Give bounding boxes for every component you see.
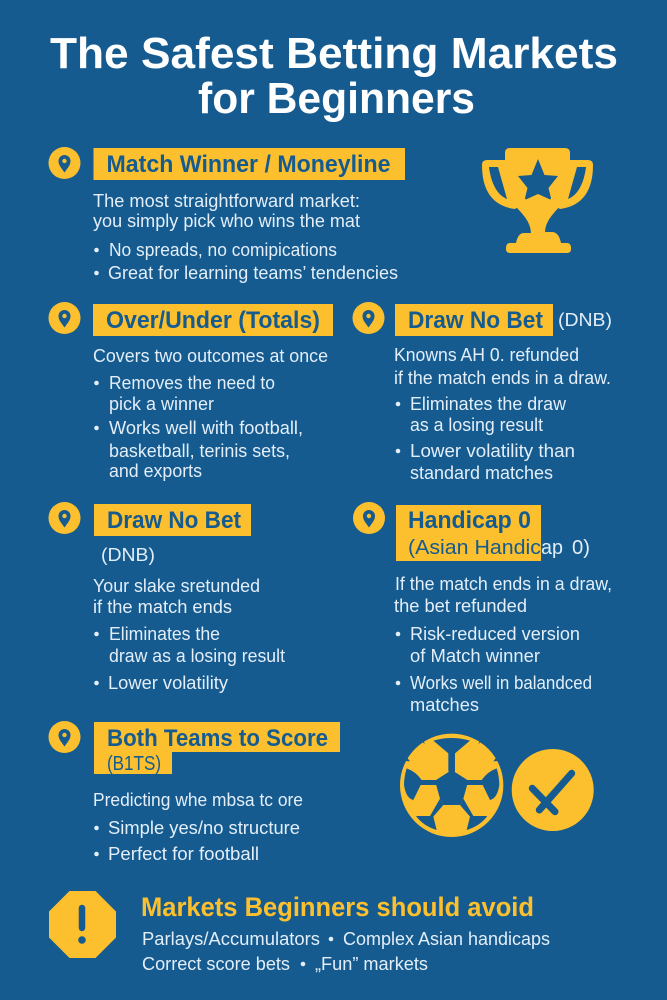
description: the bet refunded xyxy=(394,596,527,616)
avoid list xyxy=(142,929,550,974)
panel: both teams to score xyxy=(48,721,340,864)
bullet list: Eliminates the draw xyxy=(410,394,567,414)
description: Covers two outcomes at once xyxy=(93,346,328,366)
heading xyxy=(94,722,340,775)
heading: Handicap 0 xyxy=(408,507,531,534)
heading: Draw No Bet xyxy=(107,507,241,534)
description xyxy=(93,576,260,617)
avoid list: Parlays/Accumulators xyxy=(142,929,320,949)
avoid list: Complex Asian handicaps xyxy=(343,929,550,949)
bullet list: Perfect for football xyxy=(108,844,259,864)
title: The Safest Betting Markets xyxy=(50,29,618,78)
bullet list: Lower volatility than xyxy=(410,441,575,461)
icon: trophy xyxy=(482,148,593,253)
bullet list: Works well with football, xyxy=(109,418,303,438)
bullet list xyxy=(94,624,285,693)
bullet list xyxy=(396,624,592,715)
heading: Draw No Bet xyxy=(408,307,543,334)
bullet list: pick a winner xyxy=(109,394,214,414)
bullet list xyxy=(94,373,303,481)
description: if the match ends in a draw. xyxy=(394,368,611,388)
panel: draw no bet right xyxy=(352,302,612,483)
bullet list xyxy=(94,240,398,283)
icon: warning octagon xyxy=(49,891,116,958)
heading: Markets Beginners should avoid xyxy=(141,892,534,922)
title xyxy=(50,29,618,123)
description: The most straightforward market: xyxy=(93,191,360,211)
description: Predicting whe mbsa tc ore xyxy=(93,790,303,810)
heading xyxy=(396,505,590,561)
heading: (DNB) xyxy=(101,545,155,565)
bullet list xyxy=(94,818,300,864)
bullet list: and exports xyxy=(109,461,202,481)
bullet list: Simple yes/no structure xyxy=(108,818,300,838)
heading: Both Teams to Score xyxy=(107,725,328,752)
heading: (Asian Handic xyxy=(408,537,541,559)
bullet list: Risk-reduced version xyxy=(410,624,580,644)
bullet list: Eliminates the xyxy=(109,624,220,644)
heading: 0) xyxy=(572,537,590,559)
heading: Match Winner / Moneyline xyxy=(106,151,390,178)
panel: handicap 0 xyxy=(353,502,612,715)
panel: over/under xyxy=(48,302,333,481)
bullet list: standard matches xyxy=(410,463,553,483)
heading: Over/Under (Totals) xyxy=(106,307,320,334)
description: if the match ends xyxy=(93,597,232,617)
bullet list: draw as a losing result xyxy=(109,646,285,666)
bullet list: Removes the need to xyxy=(109,373,275,393)
heading: (B1TS) xyxy=(107,753,161,775)
icon: football xyxy=(400,734,503,837)
bullet list: Great for learning teams’ tendencies xyxy=(108,263,398,283)
description: Your slake sretunded xyxy=(93,576,260,596)
heading xyxy=(94,504,251,565)
icon: check badge xyxy=(512,749,594,831)
description: Knowns AH 0. refunded xyxy=(394,345,579,365)
panel: match winner xyxy=(48,147,405,283)
icon: pin xyxy=(48,302,80,334)
bullet list: basketball, terinis sets, xyxy=(109,441,290,461)
avoid list: „Fun” markets xyxy=(315,954,428,974)
description xyxy=(93,191,360,231)
bullet list: Lower volatility xyxy=(108,673,228,693)
avoid list: Correct score bets xyxy=(142,954,290,974)
description xyxy=(394,574,612,616)
panel: markets to avoid xyxy=(49,891,550,974)
description: If the match ends in a draw, xyxy=(395,574,612,594)
icon: pin xyxy=(48,721,80,753)
bullet list: Works well in balandced xyxy=(410,673,592,693)
bullet list: as a losing result xyxy=(410,415,543,435)
bullet list: matches xyxy=(410,695,479,715)
icon: pin xyxy=(352,302,384,334)
bullet list: of Match winner xyxy=(410,646,540,666)
description: you simply pick who wins the mat xyxy=(93,211,360,231)
heading xyxy=(395,304,612,336)
heading: (DNB) xyxy=(558,310,612,330)
panel: draw no bet left xyxy=(48,502,285,693)
icon: pin xyxy=(48,502,80,534)
icon: pin xyxy=(353,502,385,534)
title: for Beginners xyxy=(198,74,475,123)
description xyxy=(394,345,611,388)
heading: ap xyxy=(541,537,563,559)
bullet list: No spreads, no comipications xyxy=(109,240,337,260)
icon: pin xyxy=(48,147,80,179)
bullet list xyxy=(396,394,575,483)
